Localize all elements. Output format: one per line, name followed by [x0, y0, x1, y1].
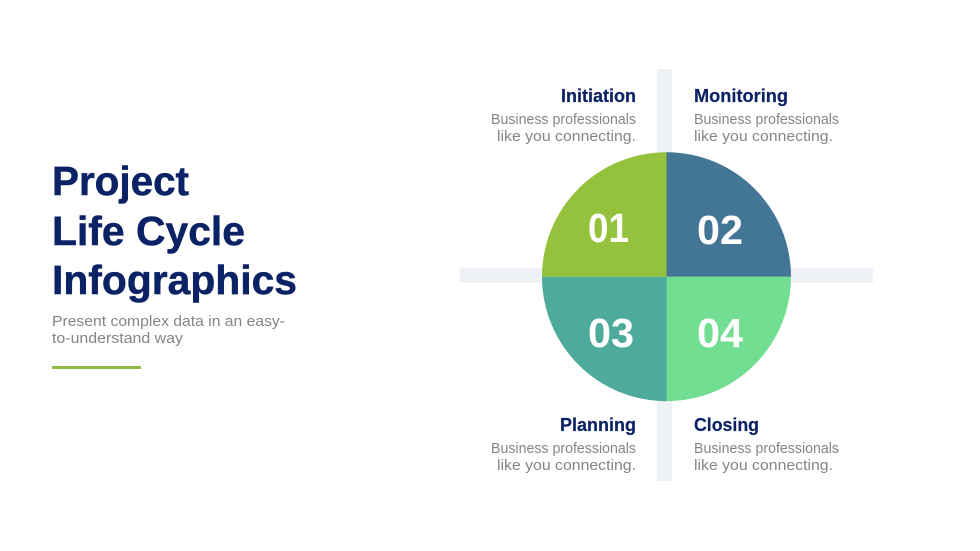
label: Initiation: like you connecting.: [497, 129, 636, 145]
number 04: 04: [697, 310, 743, 356]
label: Planning: like you connecting.: [497, 458, 636, 474]
subtitle: Present complex data in an easy-: [52, 314, 285, 330]
title: [52, 158, 297, 303]
label: Monitoring: like you connecting.: [694, 129, 833, 145]
label: Initiation: [491, 85, 636, 145]
label: Planning: [491, 414, 636, 474]
title: Life Cycle: [52, 208, 245, 254]
title: Infographics: [52, 257, 297, 303]
segment 03: [542, 277, 666, 401]
pie circle: [542, 152, 791, 401]
label: Monitoring: Monitoring: [694, 85, 788, 106]
segment 04: [666, 277, 791, 401]
subtitle: [52, 314, 285, 347]
number 03: 03: [588, 310, 634, 356]
cross bars behind circle: [460, 69, 873, 481]
label: Planning: Business professionals: [491, 441, 636, 457]
label: Monitoring: Business professionals: [694, 112, 839, 128]
number 01: 01: [588, 205, 629, 251]
label: Closing: like you connecting.: [694, 458, 833, 474]
label: Initiation: Initiation: [561, 85, 636, 106]
subtitle: to-understand way: [52, 331, 184, 347]
label: Closing: Closing: [694, 414, 759, 435]
number 02: 02: [697, 207, 743, 253]
label: Monitoring: [694, 85, 839, 145]
segment 02: [666, 152, 791, 277]
segment 01: [542, 152, 666, 277]
label: Initiation: Business professionals: [491, 112, 636, 128]
accent line: [52, 366, 141, 369]
label: Planning: Planning: [560, 414, 636, 435]
label: Closing: [694, 414, 839, 474]
label: Closing: Business professionals: [694, 441, 839, 457]
title: Project: [52, 158, 189, 204]
